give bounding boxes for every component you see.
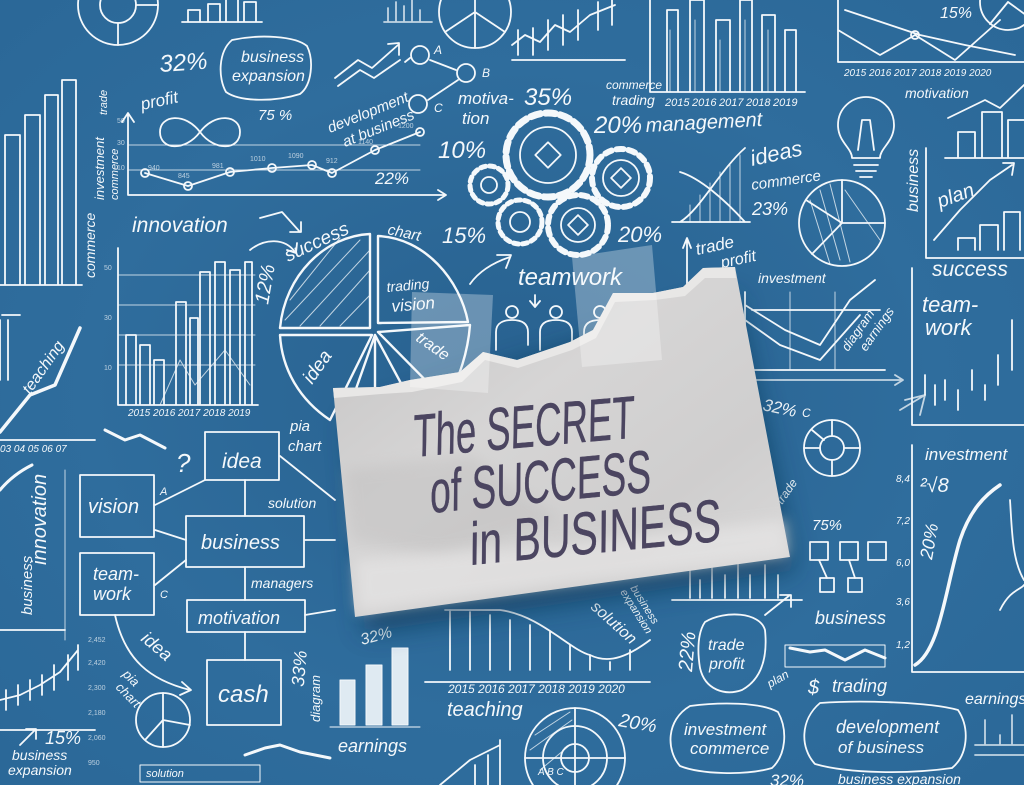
- text: commerce vertical: commerce: [82, 212, 98, 278]
- text: business vertical: business: [905, 149, 922, 212]
- text: business expansion rotated: expansion: [617, 587, 654, 636]
- text: pia chart: [113, 666, 145, 712]
- chart values: 50: [117, 118, 125, 125]
- bar chart bottom: [330, 648, 420, 727]
- text: innovation: innovation: [132, 214, 228, 237]
- title line 1: The SECRET: [413, 384, 635, 470]
- text: teaching: teaching: [447, 699, 523, 721]
- box: team-work: team-: [93, 564, 139, 584]
- text: dollar trading: $: [807, 677, 820, 699]
- text: C: C: [802, 406, 811, 420]
- text: dollar trading: trading: [832, 676, 887, 696]
- years: [664, 97, 797, 109]
- years row: 2015 2016 2017 2018 2019 2020: [843, 68, 992, 79]
- chart: curve right: [912, 445, 1024, 672]
- text: diagram earnings: diagram: [838, 307, 877, 354]
- axis values column: 2,452: [88, 637, 106, 644]
- text: 10%: 10%: [438, 137, 486, 164]
- axis values column: 2,420: [88, 660, 106, 667]
- callout: trade profit: trade: [708, 637, 745, 654]
- years: 2019: [772, 97, 797, 109]
- nodes A B C: B: [482, 66, 490, 80]
- box: motivation: [187, 600, 305, 632]
- candlestick bottom-left: [0, 645, 95, 730]
- torn edge highlight: [333, 267, 736, 398]
- zigzag arrow: [335, 43, 400, 86]
- callout: investment commerce: commerce: [690, 739, 769, 758]
- top pie: [439, 0, 511, 48]
- years: 2017: [718, 97, 744, 109]
- bar chart: left middle: [118, 248, 258, 405]
- axis values: 6,0: [896, 558, 910, 569]
- text: commerce trading: commerce: [606, 78, 662, 92]
- text: management: management: [645, 109, 764, 137]
- text: 20%: 20%: [617, 222, 662, 247]
- axis values column: 2,060: [88, 735, 106, 742]
- text: business expansion: [8, 747, 72, 778]
- target semicircle: [525, 708, 625, 785]
- box: vision: [80, 475, 154, 537]
- arrow up: [470, 255, 511, 284]
- box: cash: cash: [218, 681, 269, 708]
- axis values: 7,2: [896, 516, 910, 527]
- text: diagram earnings: earnings: [856, 304, 897, 354]
- text: 22%: 22%: [374, 169, 409, 188]
- text: trade: trade: [413, 329, 452, 364]
- box: business: [186, 516, 304, 567]
- axis values: 10: [104, 365, 112, 372]
- curve chart left: [0, 465, 65, 640]
- text: business expansion: business: [12, 747, 67, 763]
- tape strip left: [410, 292, 493, 393]
- text: A B C: A B C: [537, 767, 565, 778]
- text: trade rotated: trade: [773, 476, 800, 507]
- text: investment right: investment: [925, 445, 1008, 464]
- text: pia chart: chart: [288, 438, 322, 455]
- text: solution: solution: [146, 768, 184, 780]
- text: motivation: motiva-: [458, 89, 514, 108]
- axis values: 1,2: [896, 640, 910, 651]
- panel: paper shadow: [350, 295, 795, 632]
- vertical chart labels: trade: [98, 90, 110, 115]
- bar chart: top middle: [650, 0, 805, 92]
- text: commerce trading: trading: [612, 92, 655, 108]
- text: trading vision: [386, 275, 436, 316]
- axis values column: 950: [88, 760, 100, 767]
- area chart bottom: [425, 610, 650, 682]
- pie small: [136, 693, 190, 747]
- text: 15%: 15%: [442, 223, 486, 248]
- text: plan: plan: [933, 179, 977, 213]
- arrow to pie: [250, 212, 301, 253]
- box: business: business: [201, 532, 280, 554]
- text: root 8: ²√8: [920, 475, 949, 497]
- title line 3: in BUSINESS: [470, 487, 721, 578]
- text: business expansion rotated: business: [627, 583, 661, 627]
- axis values column: 2,300: [88, 685, 106, 692]
- nodes A B C: [405, 43, 490, 115]
- text: solution rotated: solution: [587, 598, 640, 648]
- text: pia chart: [288, 418, 322, 455]
- top small bars: [182, 0, 262, 22]
- small line chart bottom: [140, 745, 330, 782]
- text: business vertical left: business: [19, 555, 36, 615]
- years bottom: 2015 2016 2017 2018 2019 2020: [447, 682, 625, 696]
- top small chart: [384, 0, 432, 22]
- text: 20% rotated: 20%: [916, 522, 942, 562]
- text: 32%: 32%: [359, 624, 394, 649]
- text: 75%: 75%: [812, 517, 842, 534]
- box: team-work: work: [93, 584, 132, 604]
- text: year row left: 03 04 05 06 07: [0, 444, 67, 455]
- vertical chart labels: [92, 90, 121, 200]
- paper highlight: [355, 520, 788, 612]
- box: idea: idea: [222, 450, 262, 473]
- text: development of business: development: [325, 88, 412, 137]
- chart values: 1010: [250, 156, 266, 163]
- icon: people: [496, 295, 616, 350]
- text: commerce trading: [606, 78, 662, 108]
- flow connectors: [115, 456, 335, 695]
- callout: trade profit: [698, 595, 791, 692]
- text: tion: tion: [462, 109, 489, 128]
- text: 75%: 75 %: [258, 107, 292, 124]
- text: investment: investment: [758, 270, 827, 286]
- text: 15% bottom-left: [20, 728, 81, 748]
- text: diagram 33%: [288, 650, 323, 722]
- text: C: C: [160, 589, 168, 601]
- years: 2015: [664, 97, 690, 109]
- text: pia chart: pia: [289, 418, 310, 435]
- text: teamwork: teamwork: [518, 264, 624, 291]
- tape strip right: [572, 245, 662, 367]
- years: 2016: [691, 97, 717, 109]
- axis values: 30: [104, 315, 112, 322]
- axis values: [104, 265, 112, 372]
- pie chart: center: [280, 234, 470, 420]
- text: question mark: ?: [176, 448, 191, 478]
- text: 32%: 32%: [761, 395, 798, 421]
- bottom chart: [440, 740, 500, 785]
- area bars behind paper: [672, 555, 802, 600]
- line up right: [745, 375, 925, 415]
- candlestick chart top: [512, 0, 625, 60]
- text: trading vision: trading: [386, 275, 430, 295]
- box: vision: vision: [88, 496, 139, 518]
- icon: top circle chart: [78, 0, 158, 45]
- text: solution: solution: [268, 495, 316, 511]
- callout: trade profit: profit: [708, 656, 745, 673]
- text: trade: trade: [694, 232, 736, 259]
- text: motivation right: motivation: [905, 85, 969, 101]
- callout: business expansion: [221, 37, 311, 100]
- text: earnings: earnings: [338, 736, 407, 756]
- chart values: 912: [326, 158, 338, 165]
- text: success: success: [281, 218, 353, 267]
- axis values: 8,4: [896, 474, 910, 485]
- infinity icon: [160, 118, 240, 146]
- text: plan: plan: [764, 667, 791, 691]
- callout: business expansion: business: [241, 49, 304, 66]
- text: team-work: [922, 292, 978, 340]
- chart: area with curve: [672, 148, 750, 222]
- text: profit: profit: [718, 248, 758, 272]
- pie chart right: [799, 180, 885, 266]
- chart values: [117, 118, 414, 180]
- text: managers: managers: [251, 575, 313, 591]
- vertical chart labels: investment: [92, 136, 107, 200]
- title line 2: of SUCCESS: [430, 438, 651, 526]
- chart values: 845: [178, 173, 190, 180]
- callout: investment commerce: [671, 704, 784, 773]
- line chart: main top-left: [117, 113, 446, 200]
- callout: business expansion: expansion: [232, 68, 305, 85]
- text: diagram earnings: [838, 304, 897, 354]
- callout: development of business: of business: [838, 738, 924, 757]
- nodes A B C: C: [434, 101, 443, 115]
- bottom right bars: [975, 715, 1024, 755]
- line mini chart: [785, 645, 885, 667]
- icon: top right circle: [980, 0, 1024, 30]
- text: 15%: 15%: [940, 5, 972, 22]
- years: 2015 2016 2017 2018 2019: [127, 408, 251, 419]
- text: innovation vertical: innovation: [29, 474, 51, 565]
- callout: development of business: development: [836, 717, 940, 737]
- text: 20%: 20%: [593, 112, 642, 139]
- text: profit: profit: [138, 87, 181, 114]
- box: team-work: [80, 553, 154, 615]
- icon: gears: [470, 113, 650, 255]
- nodes A B C: A: [433, 43, 442, 57]
- axis values column: 2,180: [88, 710, 106, 717]
- chart values: 10: [117, 165, 125, 172]
- text: diagram 33%: 33%: [288, 650, 311, 687]
- title: [413, 384, 721, 578]
- axis values: [896, 474, 910, 651]
- text: 35%: 35%: [524, 84, 572, 111]
- squares diagram: [810, 542, 886, 592]
- text: teaching rotated: teaching: [19, 338, 68, 397]
- chart values: 940: [148, 165, 160, 172]
- box: idea: [205, 432, 279, 480]
- small line chart: [105, 430, 165, 448]
- icon: bulb: [838, 97, 894, 177]
- text: pia chart: pia: [119, 666, 143, 689]
- text: A: A: [159, 486, 167, 498]
- chart: left arrow up: [0, 315, 95, 440]
- text: chart: chart: [386, 221, 423, 245]
- axis values: 3,6: [896, 597, 910, 608]
- text: 20%: 20%: [616, 710, 658, 738]
- text: 22% rotated: 22%: [675, 631, 700, 673]
- text: business expansion: expansion: [8, 762, 72, 778]
- paper creases: [345, 455, 560, 555]
- vertical chart labels: commerce: [109, 149, 121, 200]
- text: 23%: 23%: [751, 199, 788, 219]
- text: team-work: work: [925, 315, 972, 340]
- text: diagram 33%: diagram: [308, 675, 323, 722]
- axis at center right: [683, 238, 691, 300]
- panel: top-left tall bar chart: [0, 80, 121, 285]
- chart: plan: [926, 148, 1024, 258]
- candlestick right: [912, 268, 1024, 425]
- chart: top right line: [838, 0, 1024, 62]
- box: cash: [207, 660, 281, 725]
- chart: zig-zag lines right: [745, 280, 885, 370]
- text: team-work: team-: [922, 292, 978, 317]
- bar and arrow chart right: [945, 85, 1024, 158]
- callout: development of business: [804, 702, 966, 772]
- text: of business: at business: [340, 106, 417, 151]
- target circle: [804, 420, 860, 476]
- text: trading vision: vision: [391, 293, 436, 316]
- callout: investment commerce: investment: [684, 720, 767, 739]
- text: 15% bottom-left: 15%: [45, 728, 81, 748]
- axis values: 50: [104, 265, 112, 272]
- chart values: 30: [117, 140, 125, 147]
- text: success: success: [932, 258, 1008, 281]
- axis values column: [88, 637, 106, 767]
- panel: torn paper note: [333, 267, 790, 617]
- chart values: 981: [212, 163, 224, 170]
- chart values: 1200: [398, 123, 414, 130]
- text: pia chart: chart: [113, 680, 145, 712]
- text: commerce: commerce: [750, 167, 822, 194]
- text: idea rotated: idea: [137, 628, 176, 665]
- text: idea: idea: [299, 346, 337, 388]
- text: dollar trading: [807, 676, 887, 699]
- text: ideas: ideas: [748, 136, 804, 171]
- chart values: 1140: [358, 139, 373, 146]
- text: 32%: 32%: [159, 48, 208, 78]
- years: 2018: [745, 97, 771, 109]
- chart values: 1090: [288, 153, 304, 160]
- text: business: business: [815, 608, 886, 628]
- box: motivation: motivation: [198, 608, 280, 628]
- text: 12%: 12%: [251, 263, 280, 306]
